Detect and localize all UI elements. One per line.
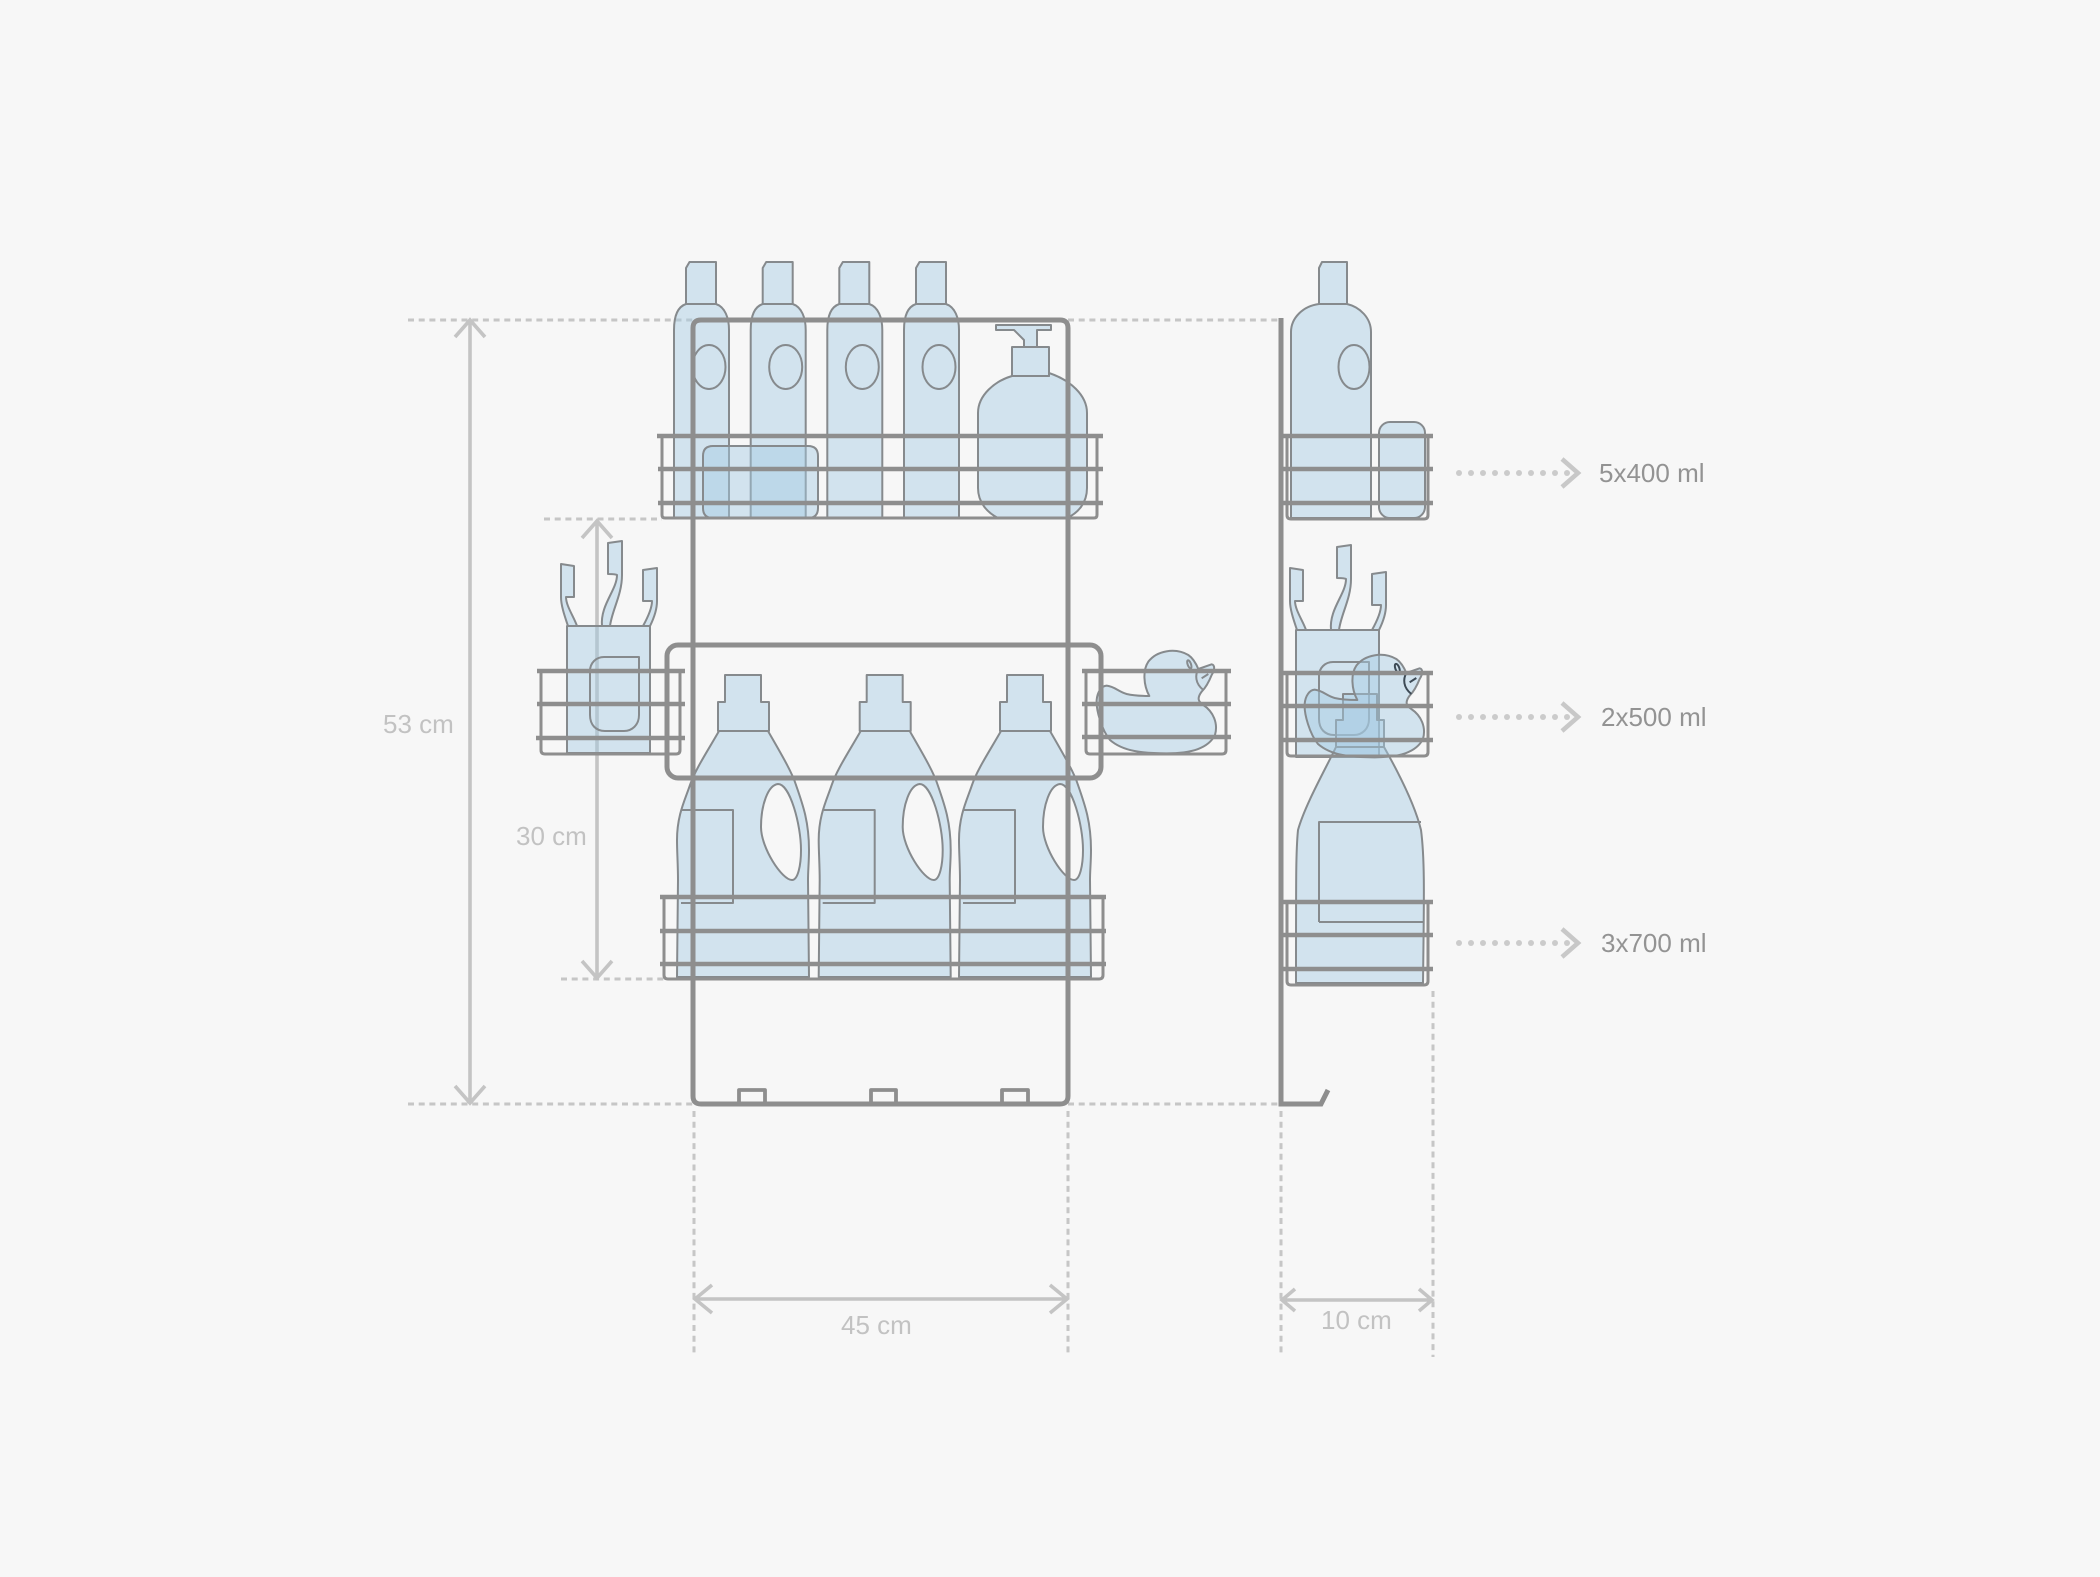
shampoo bottle 2 [751, 262, 806, 518]
dimension: 30 cm shelf spacing: 30 cm [516, 821, 587, 851]
callout: 3x700 ml: 3x700 ml [1601, 928, 1706, 958]
crossbar loop [667, 645, 1101, 778]
dimension: 53 cm height [383, 320, 485, 1103]
bottom basket [660, 897, 1106, 979]
dimension: 10 cm depth: 10 cm [1321, 1305, 1392, 1335]
laundry bottle 1 [677, 675, 809, 977]
shampoo bottle 1 [674, 262, 729, 518]
laundry bottle 2 [819, 675, 951, 977]
dimension: 45 cm width [695, 1285, 1067, 1340]
side cup [1296, 630, 1379, 757]
front view: toothbrush cup [561, 541, 657, 753]
callout: 3x700 ml [1456, 928, 1706, 958]
soap bar [703, 446, 818, 518]
side soap jar [1379, 422, 1425, 518]
mounting feet [739, 1090, 1028, 1103]
pump dispenser [978, 325, 1087, 518]
left cup basket [536, 671, 685, 754]
side top basket [1281, 436, 1433, 519]
shampoo bottle 3 [827, 262, 882, 518]
front view: top shelf items [674, 262, 1087, 518]
front view: main frame with hooks [667, 320, 1101, 1104]
cup [567, 626, 650, 753]
side view: wire baskets [1281, 436, 1433, 985]
dimension: 30 cm shelf spacing [516, 520, 612, 978]
laundry bottle 3 [959, 675, 1091, 977]
callout: 2x500 ml: 2x500 ml [1601, 702, 1706, 732]
dimension: 10 cm depth [1282, 1289, 1432, 1335]
side cup inner [1319, 662, 1369, 735]
dimension: 53 cm height: 53 cm [383, 709, 454, 739]
side view: items [1290, 262, 1425, 983]
callout: 5x400 ml: 5x400 ml [1599, 458, 1704, 488]
shampoo bottle 4 [904, 262, 959, 518]
side middle basket [1281, 673, 1433, 756]
side shampoo bottle [1291, 262, 1371, 518]
front view: bottom shelf laundry bottles [677, 675, 1091, 977]
front view: wire baskets [536, 436, 1231, 979]
callout: 5x400 ml [1456, 458, 1704, 488]
toothbrushes [561, 541, 657, 626]
dimension: 45 cm width: 45 cm [841, 1310, 912, 1340]
callout: 2x500 ml [1456, 702, 1706, 732]
front view: rubber duck [1097, 651, 1216, 753]
right duck basket [1082, 671, 1231, 754]
side bottom basket [1281, 902, 1433, 985]
top basket [657, 436, 1103, 518]
side laundry bottle [1296, 694, 1424, 983]
side toothbrushes [1290, 545, 1386, 630]
side rubber duck [1305, 655, 1424, 757]
side view: wall frame with hook [1281, 318, 1328, 1104]
